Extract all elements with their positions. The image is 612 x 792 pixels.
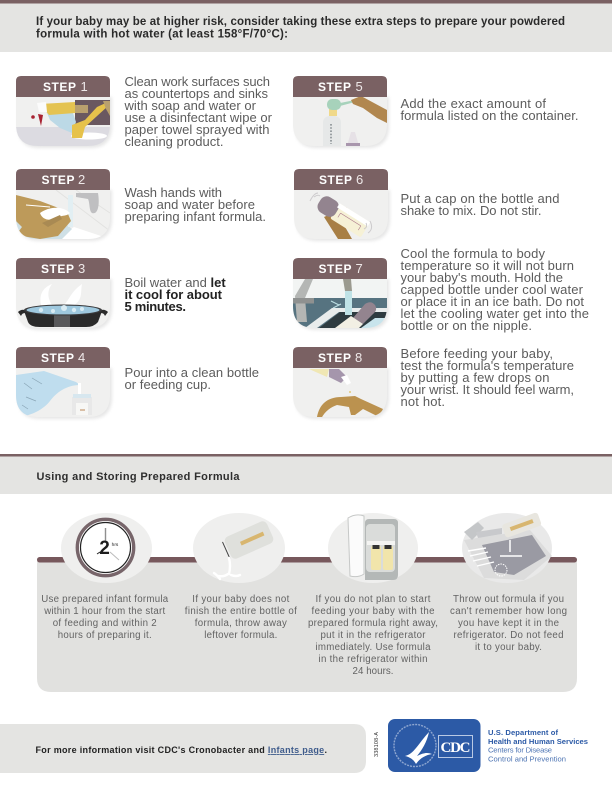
step 8 card — [293, 347, 389, 419]
step 4 card: 4 — [78, 350, 85, 365]
icon: clock 2 hours — [61, 513, 152, 583]
icon: sink with formula — [462, 512, 552, 583]
caption: throw away leftover: If your baby does not — [192, 594, 290, 605]
step 8 — [293, 346, 574, 419]
step 3 — [16, 258, 226, 330]
step 4 card — [16, 347, 112, 419]
caption: throw out when unsure: refrigerator. Do not feed — [454, 630, 564, 641]
step 3 text: it cool for about — [124, 287, 223, 302]
step 1 — [16, 74, 273, 149]
step 5 card: 5 — [356, 79, 363, 94]
step 2 — [16, 169, 266, 241]
caption: refrigerate: prepared formula right away, — [308, 618, 438, 629]
step 3 card — [16, 258, 112, 330]
step 2 card — [16, 169, 112, 241]
step 4 text: Pour into a clean bottle — [124, 365, 259, 380]
step 2 label: STEP — [42, 173, 74, 187]
footer info panel — [0, 724, 366, 773]
step 2 text: preparing infant formula. — [124, 209, 266, 224]
top banner — [0, 0, 612, 52]
publication code: 338108-A — [374, 732, 380, 757]
step 1 card — [16, 76, 112, 148]
step 4 — [16, 347, 259, 419]
step 7 text: Cool the formula to body — [400, 246, 546, 261]
step 8 card: 8 — [355, 350, 362, 365]
step 2 card: 2 — [78, 172, 85, 187]
step 7 text: bottle or on the nipple. — [400, 318, 532, 333]
section heading: Using and Storing Prepared Formula — [36, 471, 240, 483]
step 5 — [293, 76, 578, 148]
step 7 — [293, 246, 589, 333]
step 8 text: test the formula's temperature — [400, 358, 574, 373]
caption: throw out when unsure: it to your baby. — [475, 642, 542, 653]
step 6 label: STEP — [319, 173, 352, 187]
HHS and CDC agency names: Centers for Disease — [488, 746, 552, 754]
banner heading: If your baby may be at higher risk, consider taking these extra steps to prepare your powdered — [36, 16, 565, 28]
HHS and CDC agency names: Control and Prevention — [488, 754, 566, 764]
step 4 text: or feeding cup. — [124, 377, 211, 392]
caption: refrigerate: immediately. Use formula — [316, 642, 431, 653]
step 1 text: use a disinfectant wipe or — [124, 110, 273, 125]
step 1 label: STEP — [43, 80, 76, 94]
caption: use within time limits: of feeding and within 2 — [53, 618, 157, 629]
step 1 text: cleaning product. — [124, 134, 224, 149]
caption: throw away leftover: leftover formula. — [204, 630, 277, 641]
step 7 card — [293, 258, 389, 330]
step 7 label: STEP — [318, 262, 352, 276]
CDC logo: CDC — [440, 740, 470, 756]
icon: spilled bottle — [193, 513, 285, 583]
step 3 label: STEP — [41, 262, 74, 276]
step 1 text: as countertops and sinks — [124, 86, 268, 101]
caption: use within time limits: hours of preparing it. — [58, 630, 152, 641]
step 1 card: 1 — [80, 79, 88, 94]
step 5 card — [293, 76, 389, 148]
step 3 card: 3 — [78, 261, 85, 276]
caption: refrigerate: in the refrigerator within — [318, 654, 428, 665]
step 7 text: capped bottle under cool water — [400, 282, 584, 297]
step 6 card — [294, 169, 390, 241]
caption: throw out when unsure: can't remember how long — [450, 606, 567, 617]
step 8 text: by putting a few drops on — [400, 370, 550, 385]
caption: throw away leftover: finish the entire bottle of — [185, 606, 297, 617]
step 5 text: formula listed on the container. — [400, 108, 578, 123]
step 1 text: paper towel sprayed with — [124, 122, 270, 137]
caption: refrigerate: If you do not plan to start — [316, 594, 431, 605]
banner heading: formula with hot water (at least 158°F/70°C): — [36, 28, 288, 40]
step 4 label: STEP — [41, 351, 74, 365]
storage panel — [37, 557, 577, 692]
caption: use within time limits: within 1 hour from the start — [43, 606, 165, 617]
step 1 text: with soap and water or — [124, 98, 257, 113]
step 7 text: or place it in an ice bath. Do not — [400, 294, 584, 309]
step 7 card: 7 — [356, 261, 363, 276]
step 7 text: let the cooling water get into the — [400, 306, 589, 321]
icon: clock 2 hours: 2 — [99, 538, 110, 559]
step 7 text: temperature so it will not burn — [400, 258, 574, 273]
step 6 card: 6 — [356, 172, 363, 187]
icon: clock 2 hours: hrs — [112, 542, 119, 548]
step 2 text: Wash hands with — [124, 185, 222, 200]
step 1 text: Clean work surfaces such — [124, 74, 270, 89]
HHS and CDC agency names — [488, 728, 588, 764]
caption: refrigerate: feeding your baby with the — [312, 606, 434, 617]
caption: throw out when unsure: Throw out formula if you — [453, 594, 564, 605]
step 6 text: shake to mix. Do not stir. — [400, 203, 542, 218]
step 3 text: Boil water and let — [124, 275, 226, 290]
caption: throw away leftover: formula, throw away — [195, 618, 287, 629]
CDC logo — [388, 719, 480, 772]
step 8 text: not hot. — [400, 394, 445, 409]
step 2 text: soap and water before — [124, 197, 255, 212]
step 5 label: STEP — [318, 80, 351, 94]
HHS and CDC agency names: U.S. Department of — [488, 728, 558, 737]
step 8 text: Before feeding your baby, — [400, 346, 553, 361]
step 3 text: 5 minutes. — [124, 299, 186, 314]
step 8 label: STEP — [318, 351, 351, 365]
section banner — [0, 454, 612, 494]
caption: throw out when unsure: you have kept it in the — [458, 618, 559, 629]
step 6 — [294, 169, 560, 241]
caption: refrigerate: put it in the refrigerator — [320, 630, 426, 641]
HHS and CDC agency names: Health and Human Services — [488, 737, 588, 746]
caption: refrigerate: 24 hours. — [352, 666, 394, 677]
icon: refrigerator — [328, 513, 418, 583]
footer text: For more information visit CDC's Cronobacter and Infants page. — [36, 745, 327, 755]
step 5 text: Add the exact amount of — [400, 96, 546, 111]
step 6 text: Put a cap on the bottle and — [400, 191, 560, 206]
caption: use within time limits: Use prepared infant formula — [41, 594, 169, 605]
step 8 text: your wrist. It should feel warm, — [400, 382, 574, 397]
step 7 text: your baby's mouth. Hold the — [400, 270, 563, 285]
